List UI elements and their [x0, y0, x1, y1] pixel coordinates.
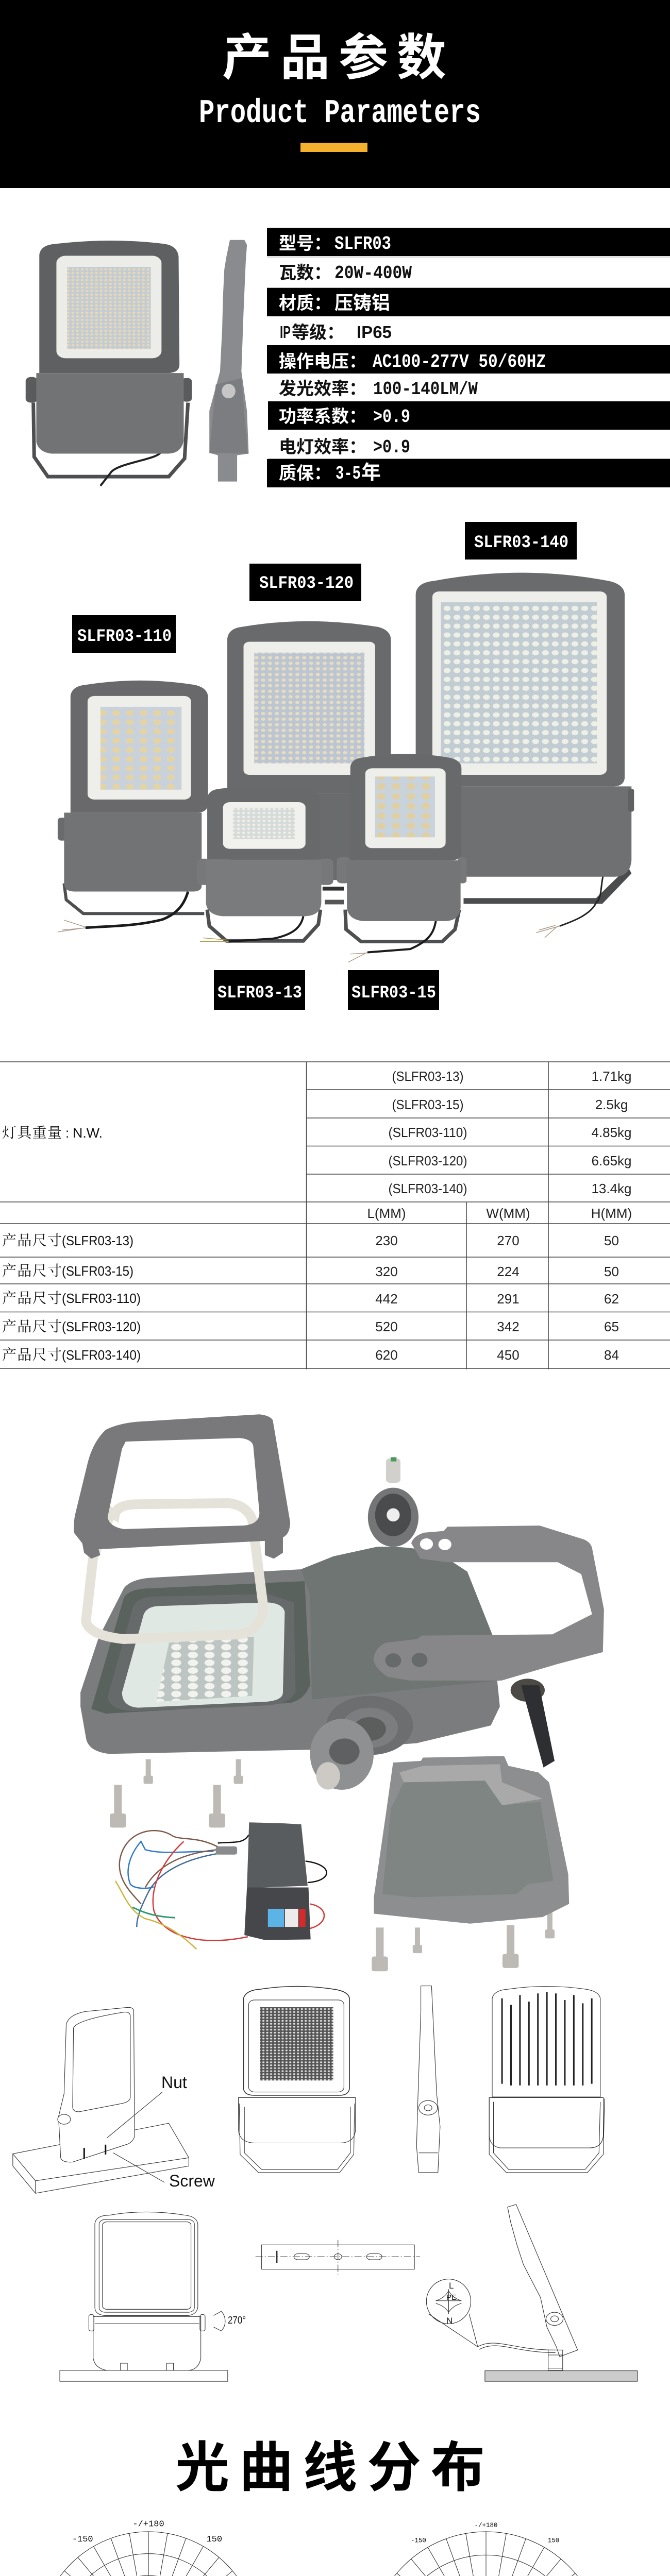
table: dimension header: L(MM): [367, 1206, 406, 1221]
image: lamp family group photo: [58, 573, 634, 962]
text: wiring terminals: PE: [446, 2293, 457, 2302]
table: SLFR03-110 dimensions: 产品尺寸: [2, 1290, 62, 1307]
exploded: screws: [110, 1759, 555, 1971]
spec: warranty: 质保：: [279, 459, 331, 484]
table: SLFR03-13 dimensions: 50: [604, 1233, 619, 1248]
table: SLFR03-120 dimensions: 342: [497, 1319, 520, 1334]
label: SLFR03-13: [214, 970, 305, 1010]
table: weight values: 4.85kg: [591, 1125, 632, 1140]
table: dimension header: W(MM): [486, 1206, 530, 1221]
table: SLFR03-120 dimensions: 520: [375, 1319, 398, 1334]
table: SLFR03-140 dimensions: 84: [604, 1347, 619, 1363]
exploded: lower parts: [110, 1679, 569, 1971]
lamp: SLFR03-15: [337, 754, 466, 962]
label: SLFR03-120: [249, 564, 361, 601]
spec: IP rating: IP65: [357, 323, 392, 342]
lamp: SLFR03-13: [197, 786, 333, 941]
table row label: weight: :: [65, 1125, 69, 1141]
spec: luminous efficacy: 100-140LM/W: [373, 379, 478, 400]
chart: polar curve 30°: [20, 2519, 291, 2576]
table: SLFR03-120 dimensions: [2, 1318, 619, 1335]
spec: material: 材质：: [279, 289, 331, 314]
spec: voltage: 操作电压：: [279, 347, 366, 372]
spec: IP rating: 等级：: [292, 318, 344, 344]
table: SLFR03-15 dimensions: 50: [604, 1264, 619, 1279]
label: SLFR03-140: [465, 522, 577, 560]
table: weight values: 2.5kg: [595, 1097, 628, 1112]
table: SLFR03-13 dimensions: 230: [375, 1233, 398, 1248]
table: SLFR03-110 dimensions: 442: [375, 1291, 398, 1307]
text: wiring terminals: L: [449, 2281, 454, 2291]
spec: lamp efficiency: >0.9: [373, 437, 410, 458]
spec: wattage: 20W-400W: [334, 263, 412, 284]
spec: power factor: >0.9: [373, 406, 410, 428]
exploded: mounting bracket: [373, 1526, 604, 1681]
spec: voltage: AC100-277V 50/60HZ: [373, 351, 546, 372]
exploded: upper dial and pin: [368, 1457, 418, 1547]
chart: polar curve 30°: -150: [72, 2535, 93, 2545]
table: weight values: (SLFR03-120): [389, 1153, 467, 1168]
drawing: installed front view with rotation: [60, 2212, 246, 2381]
label: SLFR03-140: SLFR03-140: [474, 533, 568, 553]
table: weight values: 13.4kg: [591, 1181, 632, 1196]
title: 产品参数: 产品参数: [222, 30, 455, 86]
table: SLFR03-13 dimensions: 产品尺寸: [2, 1232, 62, 1249]
label: SLFR03-110: [72, 615, 176, 653]
exploded: silicone gasket: [86, 1503, 263, 1639]
label: SLFR03-120: SLFR03-120: [259, 574, 354, 594]
spec: wattage: 瓦数：: [279, 259, 331, 284]
image: exploded view of the lamp: [74, 1414, 604, 1971]
table: SLFR03-140 dimensions: 产品尺寸: [2, 1347, 62, 1363]
chart: polar curve 30°: -/+180: [132, 2519, 164, 2529]
exploded: rear cover: [374, 1756, 569, 1924]
drawing: bracket plan: [256, 2240, 420, 2275]
spec: warranty: 3-5: [336, 463, 361, 484]
spec: power factor: 功率系数：: [279, 402, 366, 428]
spec: model: SLFR03: [334, 233, 391, 255]
table row label: weight: 灯具重量: [2, 1125, 62, 1141]
spec: material: [279, 289, 390, 314]
table: SLFR03-110 dimensions: [2, 1290, 619, 1307]
image: floodlight side view: [209, 240, 248, 482]
spec: power factor: [279, 402, 410, 428]
label: SLFR03-15: [348, 970, 439, 1010]
table: weight and dimensions: [0, 1062, 670, 1369]
table: SLFR03-15 dimensions: 224: [497, 1264, 520, 1279]
spec: warranty: 年: [361, 462, 381, 484]
drawing: front elevation: [239, 1986, 356, 2173]
panel: specification list: [267, 228, 670, 487]
table: SLFR03-110 dimensions: 291: [497, 1291, 520, 1307]
spec: warranty: [279, 459, 381, 484]
table: SLFR03-120 dimensions: (SLFR03-120): [62, 1319, 141, 1334]
table row label: weight: [2, 1125, 103, 1141]
table: SLFR03-15 dimensions: (SLFR03-15): [62, 1263, 133, 1279]
text: wiring terminals: N: [446, 2316, 453, 2326]
chart: polar curve 60°: 150: [548, 2537, 559, 2544]
table: SLFR03-140 dimensions: (SLFR03-140): [62, 1347, 141, 1363]
table: weight values: 6.65kg: [591, 1153, 632, 1168]
spec: luminous efficacy: 发光效率：: [279, 375, 366, 400]
table: dimension header: [367, 1206, 632, 1221]
table: weight values: (SLFR03-140): [389, 1181, 467, 1196]
spec: lamp efficiency: [279, 433, 410, 458]
table row label: weight: N.W.: [73, 1125, 103, 1141]
table: SLFR03-15 dimensions: 320: [375, 1264, 398, 1279]
table: SLFR03-120 dimensions: 65: [604, 1319, 619, 1334]
drawing: tilted side view with wiring callout: [426, 2205, 638, 2381]
lamp: SLFR03-140: [416, 573, 634, 938]
table: SLFR03-13 dimensions: [2, 1232, 619, 1249]
table: SLFR03-140 dimensions: 620: [375, 1347, 398, 1363]
table: SLFR03-140 dimensions: [2, 1347, 619, 1363]
table: SLFR03-15 dimensions: [2, 1263, 619, 1279]
accent bar: [300, 143, 367, 152]
image: main floodlight front view: [26, 241, 192, 486]
spec: voltage: [279, 347, 546, 372]
table: SLFR03-13 dimensions: 270: [497, 1233, 520, 1248]
spec: luminous efficacy: [279, 375, 478, 400]
chart: polar curve 60°: -150: [411, 2537, 426, 2544]
spec: wattage: [279, 259, 412, 284]
drawing: side elevation: [416, 1986, 440, 2173]
table: SLFR03-110 dimensions: (SLFR03-110): [62, 1291, 141, 1306]
text: wiring terminals: [446, 2281, 457, 2326]
exploded: front frame: [74, 1414, 290, 1558]
heading: 光曲线分布: 光曲线分布: [175, 2438, 495, 2498]
table: weight values: (SLFR03-13): [392, 1069, 464, 1084]
table: weight values: [389, 1069, 632, 1196]
exploded: power cable: [511, 1679, 555, 1768]
table: weight values: 1.71kg: [591, 1069, 632, 1084]
chart: polar curve 60°: -/+180: [475, 2522, 497, 2529]
spec: model: [279, 229, 391, 255]
lamp: SLFR03-110: [58, 681, 208, 932]
exploded: housing body: [80, 1547, 500, 1754]
chart: polar curve 60°: [353, 2522, 638, 2576]
chart: polar curve 30°: 150: [206, 2535, 222, 2545]
table: SLFR03-140 dimensions: 450: [497, 1347, 520, 1363]
table: weight values: (SLFR03-110): [389, 1125, 467, 1140]
spec: material: 压铸铝: [334, 292, 390, 313]
text: Nut: Nut: [161, 2073, 187, 2092]
table: SLFR03-13 dimensions: (SLFR03-13): [62, 1233, 133, 1248]
label: SLFR03-15: SLFR03-15: [351, 984, 436, 1003]
drawing: mounting perspective with nut and screw: [13, 2007, 215, 2193]
text: Screw: Screw: [169, 2172, 215, 2190]
exploded: adjuster dial and knob: [310, 1696, 413, 1790]
lamp: SLFR03-120: [227, 621, 391, 904]
label: SLFR03-13: SLFR03-13: [217, 984, 302, 1003]
text: 270 degrees: 270°: [228, 2315, 246, 2326]
spec: IP rating: IP: [280, 323, 291, 342]
table: dimension header: H(MM): [591, 1206, 632, 1221]
table: SLFR03-110 dimensions: 62: [604, 1291, 619, 1307]
drawing: rear elevation with heat sink fins: [489, 1986, 605, 2173]
panel: header banner: [0, 0, 670, 188]
spec: lamp efficiency: 电灯效率：: [279, 433, 366, 458]
subtitle: Product Parameters: Product Parameters: [199, 94, 481, 132]
label: SLFR03-110: SLFR03-110: [77, 627, 172, 647]
table: weight values: (SLFR03-15): [392, 1097, 464, 1112]
exploded: LED driver with wires: [115, 1822, 327, 1949]
table: SLFR03-120 dimensions: 产品尺寸: [2, 1318, 62, 1335]
table: SLFR03-15 dimensions: 产品尺寸: [2, 1263, 62, 1279]
spec: model: 型号：: [279, 229, 331, 255]
spec: IP rating: [280, 318, 392, 344]
